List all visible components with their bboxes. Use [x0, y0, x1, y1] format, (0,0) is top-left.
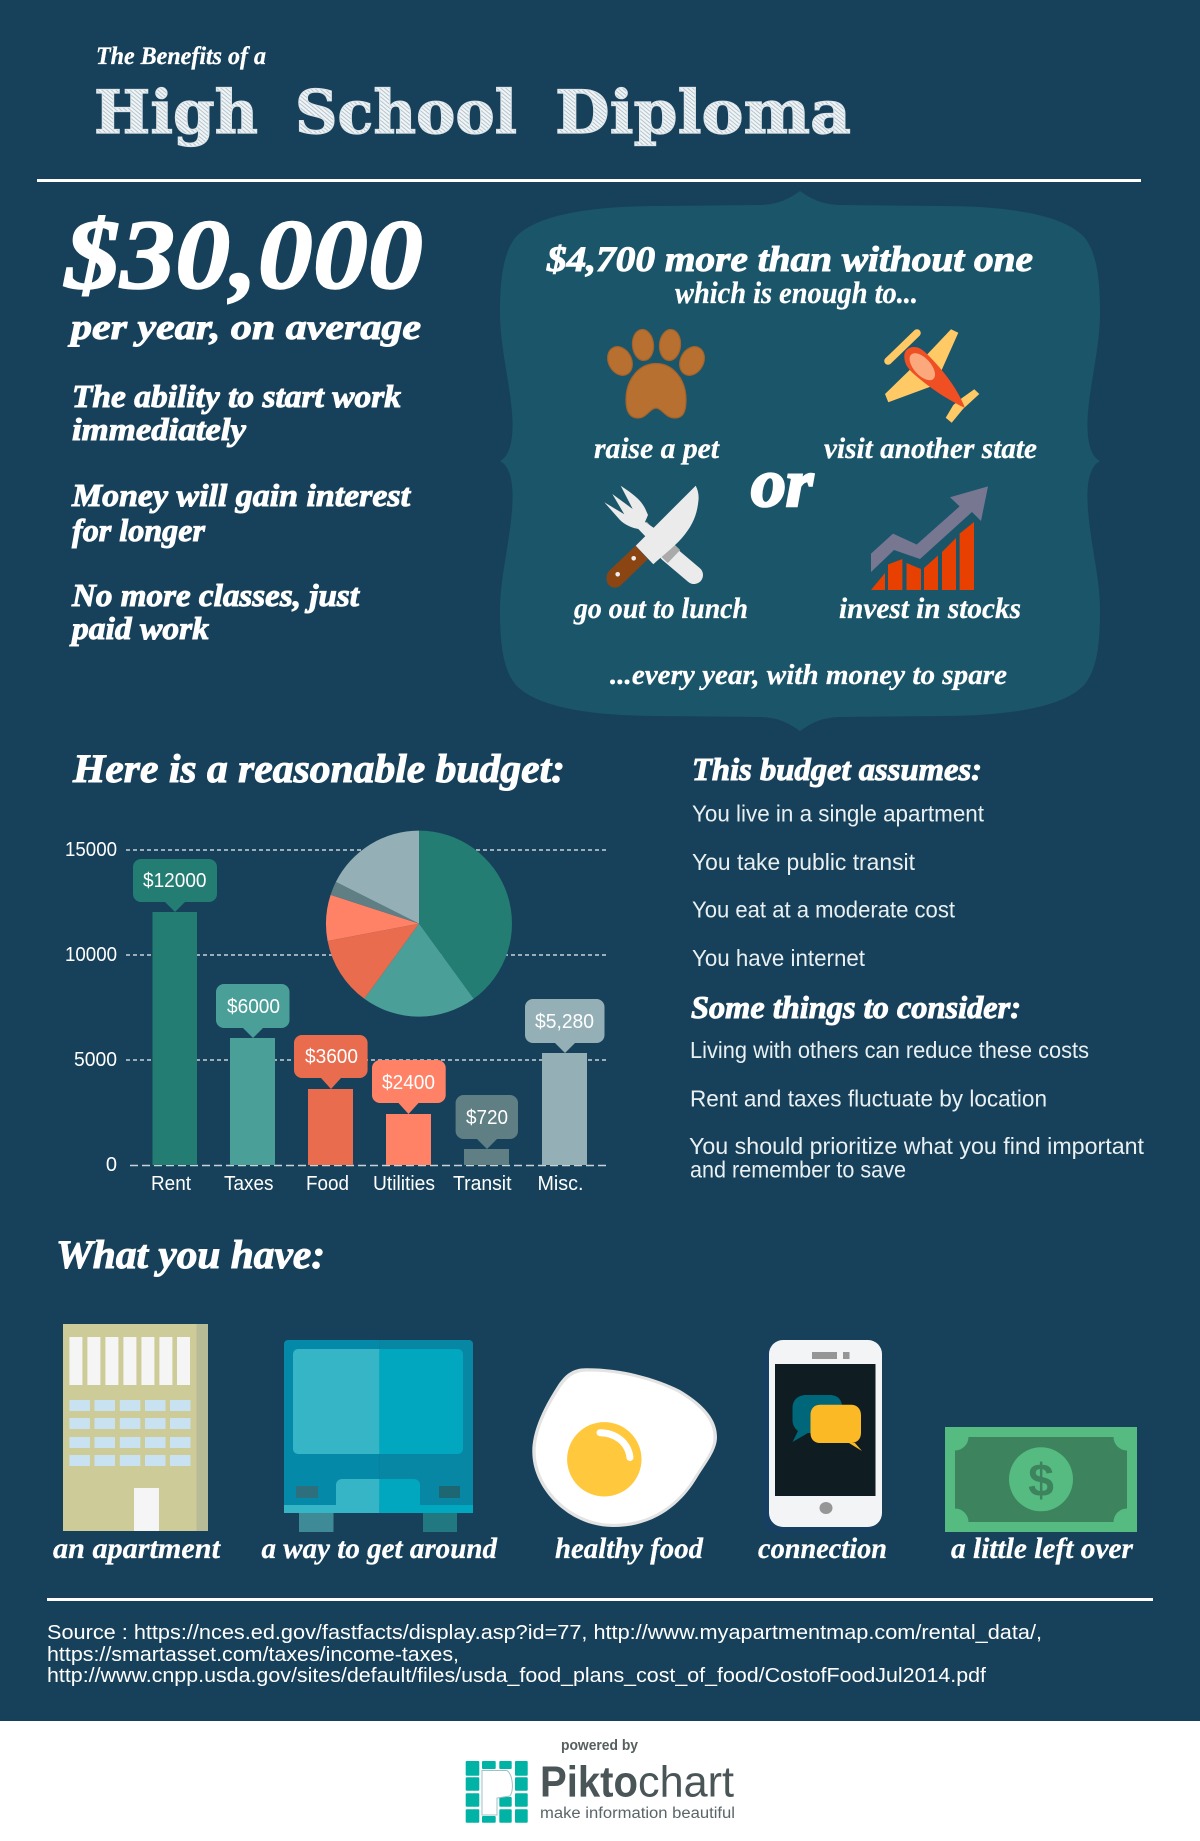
footer: Piktochart branding — [0, 1721, 1200, 1841]
icon: fried egg — [532, 1368, 717, 1527]
x axis labels: Food — [306, 1173, 349, 1195]
x axis labels — [151, 1173, 584, 1195]
assumptions list: You take public transit — [692, 849, 916, 875]
label: connection: connection — [758, 1532, 887, 1565]
label: go out to lunch: go out to lunch — [573, 592, 748, 625]
label: healthy food: healthy food — [555, 1532, 704, 1565]
assumptions list: You live in a single apartment — [692, 800, 985, 826]
icon: plane — [885, 329, 979, 423]
assumptions list: You eat at a moderate cost — [692, 896, 956, 922]
heading: some things to consider: Some things to consider: — [691, 989, 1021, 1025]
title block — [94, 43, 851, 148]
wordmark: chart — [638, 1758, 734, 1806]
assumptions list: You have internet — [692, 945, 866, 971]
y axis labels: 15000 — [65, 839, 117, 861]
x axis labels: Utilities — [373, 1173, 435, 1195]
considerations list: Rent and taxes fluctuate by location — [690, 1086, 1047, 1112]
y axis labels: 5000 — [74, 1049, 117, 1071]
bar: Food — [294, 1035, 368, 1165]
wordmark: Pikto — [540, 1758, 638, 1806]
benefit 1: immediately — [72, 411, 247, 447]
y axis labels — [65, 839, 117, 1176]
source citation: http://www.cnpp.usda.gov/sites/default/files/usda_food_plans_cost_of_food/CostofFoodJul2014.pdf — [47, 1665, 986, 1687]
chat bubbles — [792, 1395, 862, 1451]
title kicker: The Benefits of a — [96, 43, 266, 70]
bar: Taxes: $6000 — [227, 996, 280, 1018]
y axis labels: 10000 — [65, 944, 117, 966]
x axis labels: Transit — [453, 1173, 512, 1195]
bar: Food: $3600 — [305, 1046, 358, 1068]
bar: Transit: $720 — [466, 1107, 508, 1129]
panel footer: ...every year, with money to spare — [610, 659, 1007, 691]
bar: Utilities — [372, 1060, 446, 1165]
icon row: what you have — [53, 1324, 1137, 1565]
bar: Misc — [525, 999, 604, 1165]
bar: Transit — [456, 1095, 518, 1165]
bar: Misc: $5,280 — [535, 1011, 594, 1033]
x axis labels: Taxes — [224, 1173, 274, 1195]
source citation — [47, 1622, 1042, 1687]
per year text: per year, on average — [67, 307, 421, 347]
bar: Utilities: $2400 — [382, 1072, 435, 1094]
x axis labels: Rent — [151, 1173, 191, 1195]
panel: what the extra money buys — [500, 191, 1100, 731]
benefit 3: No more classes, just — [71, 577, 360, 613]
considerations list — [689, 1037, 1145, 1182]
powered by: powered by — [561, 1738, 638, 1754]
bar: Taxes — [216, 984, 290, 1165]
heading: this budget assumes: This budget assumes: — [692, 751, 982, 787]
benefit 3: paid work — [69, 610, 209, 646]
logo mark — [466, 1761, 528, 1823]
label: a little left over: a little left over — [951, 1532, 1133, 1565]
main title: School — [295, 78, 517, 148]
panel shape — [500, 191, 1100, 731]
icon: paw — [603, 329, 709, 418]
label: visit another state: visit another state — [824, 432, 1037, 465]
bar: Rent: $12000 — [143, 870, 206, 892]
budget assumptions — [689, 751, 1145, 1182]
label: raise a pet: raise a pet — [594, 432, 721, 465]
considerations list: Living with others can reduce these costs — [690, 1037, 1089, 1063]
icon: smartphone — [763, 1340, 882, 1533]
icon: bus — [284, 1340, 473, 1532]
big number: $30,000 — [63, 199, 423, 310]
icon: dollar bill — [945, 1427, 1137, 1532]
panel heading: $4,700 more than without one — [546, 239, 1033, 279]
icon: apartment building — [63, 1324, 208, 1531]
label: an apartment: an apartment — [53, 1532, 222, 1565]
y axis labels: 0 — [106, 1154, 117, 1176]
main title: Diploma — [555, 78, 851, 148]
benefit 2: for longer — [72, 512, 206, 548]
tagline: make information beautiful — [540, 1805, 735, 1822]
x axis labels: Misc. — [538, 1173, 584, 1195]
source citation: Source : https://nces.ed.gov/fastfacts/display.asp?id=77, http://www.myapartmentmap.com/rental_data/, — [47, 1622, 1042, 1644]
budget chart — [65, 831, 606, 1195]
icon: fork and knife — [604, 486, 699, 588]
source citation: https://smartasset.com/taxes/income-taxes, — [47, 1644, 459, 1666]
benefit 2: Money will gain interest — [71, 477, 411, 513]
or: or — [751, 445, 814, 521]
heading: what you have: What you have: — [56, 1232, 325, 1277]
benefit 1: The ability to start work — [72, 378, 401, 414]
budget heading: Here is a reasonable budget: — [72, 746, 565, 791]
pie chart — [326, 831, 512, 1017]
label: invest in stocks: invest in stocks — [839, 592, 1021, 625]
icon: stocks chart — [871, 486, 988, 590]
main title: High — [94, 78, 258, 148]
main title — [94, 78, 851, 148]
considerations list: You should prioritize what you find important — [689, 1133, 1145, 1159]
considerations list: and remember to save — [690, 1156, 906, 1182]
panel subheading: which is enough to... — [675, 275, 918, 310]
label: a way to get around: a way to get around — [262, 1532, 498, 1565]
left column: salary benefits — [63, 199, 423, 646]
assumptions list — [692, 800, 985, 971]
bar: Rent — [133, 859, 217, 1165]
icon: dollar bill: $ — [1028, 1454, 1054, 1506]
